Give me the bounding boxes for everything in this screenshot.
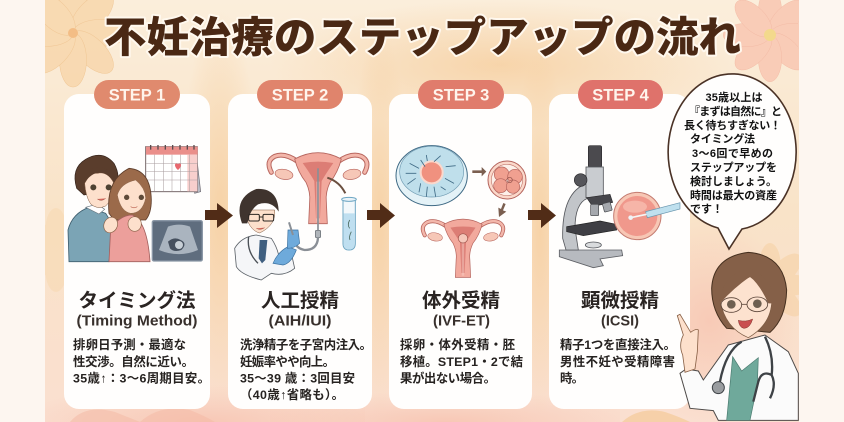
description: step 2: 妊娠率やや向上。 [240,354,335,369]
injection pipette [628,203,680,220]
description: step 1: 排卵日予測・最適な [73,337,186,352]
hands [101,215,141,235]
arrow: embryo to uterus [498,203,506,217]
flower: top right [723,0,799,82]
heading: タイミング法: タイミング法 [78,289,196,312]
description: step 1 [73,337,210,386]
speech bubble: 長く待ちすぎない！ [684,118,781,132]
flower: lower left [45,208,64,292]
speech bubble: です！ [690,202,723,216]
illustration: petri dish, embryo and uterus [396,146,526,277]
description: step 4: 男性不妊や受精障害 [560,354,675,369]
coat [680,335,798,420]
petri dish [396,146,467,206]
uterus with embryo [423,219,503,277]
speech bubble: 時間は最大の資産 [690,188,777,202]
description: step 4 [560,337,676,386]
description: step 3: 果が出ない場合。 [400,370,496,386]
title: 不妊治療のステップアップの流れ [104,14,741,61]
speech bubble: 検討しましょう。 [690,174,777,188]
pointing hand [677,314,698,372]
calendar [146,145,201,193]
speech bubble: 35歳以上は [706,90,762,104]
description: step 1: 性交渉。自然に近い。 [73,354,194,369]
step 1 badge [94,80,180,109]
illustration: microscope and egg injection [559,146,680,268]
microscope [559,146,623,268]
flower: right middle [761,243,799,316]
description: step 2: 洗浄精子を子宮内注入。 [240,337,372,352]
description: step 3 [400,337,523,386]
subheading: ICSI: (ICSI) [601,314,639,330]
speech bubble: 『まずは自然に』と [689,104,782,118]
man [68,155,118,262]
step 4 badge [578,80,663,109]
face [720,277,772,338]
character: female doctor [677,252,798,420]
illustration: doctor, uterus and test tube [235,153,367,280]
ultrasound image [152,221,202,261]
description: step 3: 移植。STEP1・2で結 [400,354,523,369]
panel: step 3 [389,80,532,409]
arrow: step 2 to step 3 [367,203,395,228]
speech bubble: タイミング法 [690,132,755,146]
panel: step 2 [228,80,372,409]
speech bubble: ステップアップを [690,161,777,174]
doctor [235,189,300,280]
eyes and glasses [721,297,768,312]
hair back [712,252,787,332]
woman [109,168,151,262]
description: step 4: 時。 [560,370,584,386]
arrow to uterus [327,178,345,193]
uterus with catheter [269,153,367,250]
heading: 人工授精: 人工授精 [261,290,339,312]
embryo [488,161,526,199]
panel: step 4 [549,80,690,409]
mouth [738,319,753,328]
description: step 2: 35〜39 歳：3回目安 [240,370,355,386]
heading: 顕微授精: 顕微授精 [581,290,659,312]
scrubs [727,357,758,420]
speech bubble: 3〜6回で早めの [692,147,773,160]
speech bubble [668,74,796,249]
step 2 badge [257,80,343,109]
illustration: couple, calendar and ultrasound [68,145,202,262]
description: step 3: 採卵・体外受精・胚 [400,337,516,352]
petals: bottom left [70,408,215,422]
panel: step 1 [64,80,210,409]
heading: 体外受精: 体外受精 [422,289,500,312]
arrow: step 3 to step 4 [528,203,556,228]
subheading: AIH/IUI: (AIH/IUI) [268,314,332,330]
step 1 badge: STEP 1 [109,86,165,104]
test tube [342,197,356,250]
flower: top left [45,0,120,88]
step 4 badge: STEP 4 [592,86,650,104]
step 3 badge: STEP 3 [433,86,489,104]
petals: bottom right [622,410,690,422]
step 3 badge [418,80,504,109]
subheading: Timing Method: (Timing Method) [76,314,198,330]
description: step 1: 35歳↑：3〜6周期目安。 [73,370,210,386]
subheading: IVF-ET: (IVF-ET) [433,314,490,330]
description: step 4: 精子1つを直接注入。 [560,337,676,352]
stethoscope [719,337,774,402]
description: step 2: （40歳↑省略も）。 [240,387,344,402]
arrow: step 1 to step 2 [205,203,233,228]
arrow: dish to embryo [472,167,486,176]
description: step 2 [240,337,372,402]
egg under injection [614,192,661,240]
step 2 badge: STEP 2 [272,86,328,104]
